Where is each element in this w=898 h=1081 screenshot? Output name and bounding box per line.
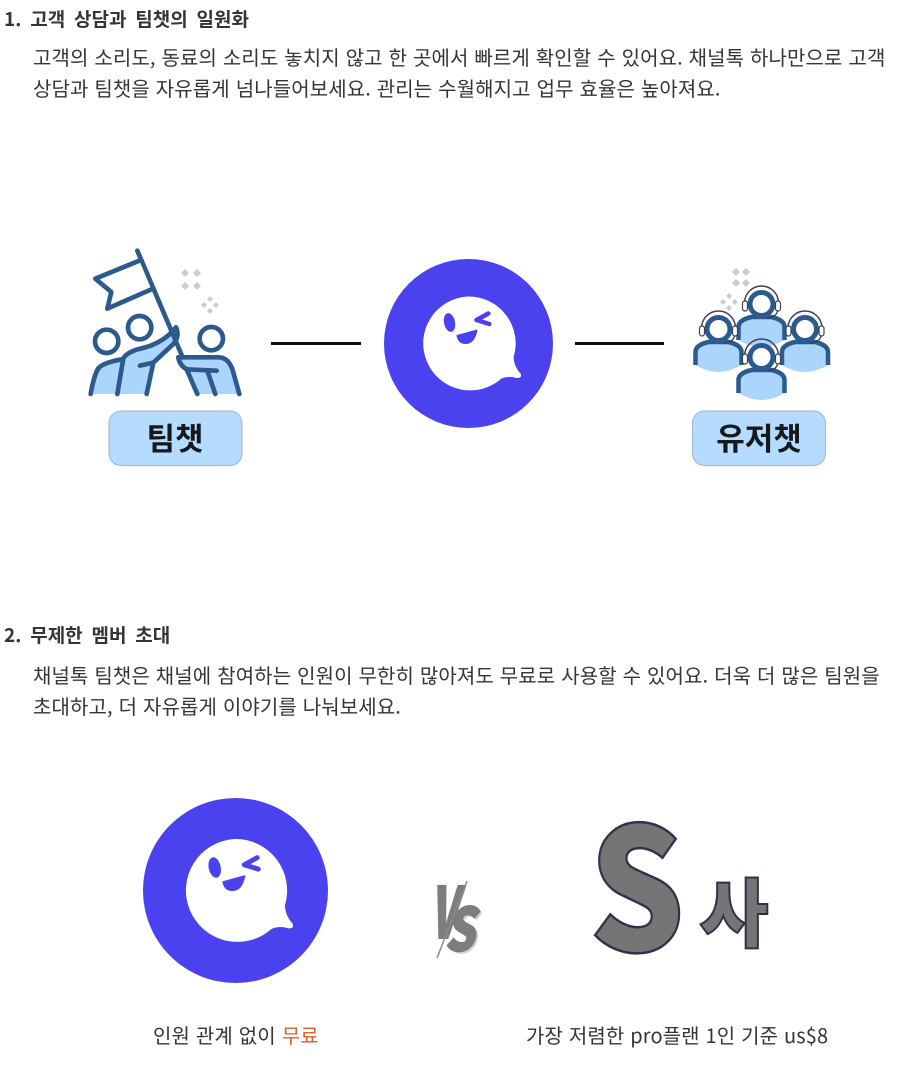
agent: left [696,311,742,372]
comparison: Channel Talk versus S company [143,755,769,1001]
icon: team with flag [91,251,239,394]
logo: S company [589,755,769,1001]
text block: section 1 body: 상담과 팀챗을 자유롭게 넘나들어보세요. 관리는 수월해지고 업무 효율은 높아져요. [33,72,721,102]
label: team chat: 팀챗 [146,414,204,459]
label: user chat: 유저챗 [716,414,802,459]
logo: S company: 사 [699,854,769,963]
agent: top [738,286,784,347]
agent: right [782,311,828,372]
text block: section 2 body: 채널톡 팀챗은 채널에 참여하는 인원이 무한히 많아져도 무료로 사용할 수 있어요. 더욱 더 많은 팀원을 [33,660,880,689]
text block: section 1 body [33,42,885,102]
icon: support agents with headsets [696,286,828,400]
agent: front [738,339,784,400]
connector: right line [575,342,664,345]
icon: VS mark: V [426,856,470,958]
text block: section 1 body: 고객의 소리도, 동료의 소리도 놓치지 않고 한 곳에서 빠르게 확인할 수 있어요. 채널톡 하나만으로 고객 [33,42,885,71]
caption: Channel Talk free regardless of headcount: 인원 관계 없이 무료 [153,1020,319,1049]
icon: VS mark: S [440,881,489,968]
icon: VS mark: S [442,883,491,970]
icon: Channel Talk logo [384,259,553,428]
icon: Channel Talk logo large [143,798,328,983]
diagram: team chat and user chat connected through Channel Talk [91,251,828,466]
text block: section 2 body [33,660,880,720]
logo: S company: S [589,755,685,1001]
heading: section 2: 2. 무제한 멤버 초대 [4,621,170,648]
icon: VS mark [426,856,491,970]
label: team chat [109,411,242,466]
icon: sparkles near team [181,269,219,314]
label: user chat [692,411,826,466]
heading: section 1: 1. 고객 상담과 팀챗의 일원화 [4,5,249,32]
caption: competitor price: 가장 저렴한 pro플랜 1인 기준 us$8 [526,1020,828,1049]
connector: left line [271,342,361,345]
text block: section 2 body: 초대하고, 더 자유롭게 이야기를 나눠보세요. [33,690,401,720]
icon: sparkles near agents [720,268,750,311]
